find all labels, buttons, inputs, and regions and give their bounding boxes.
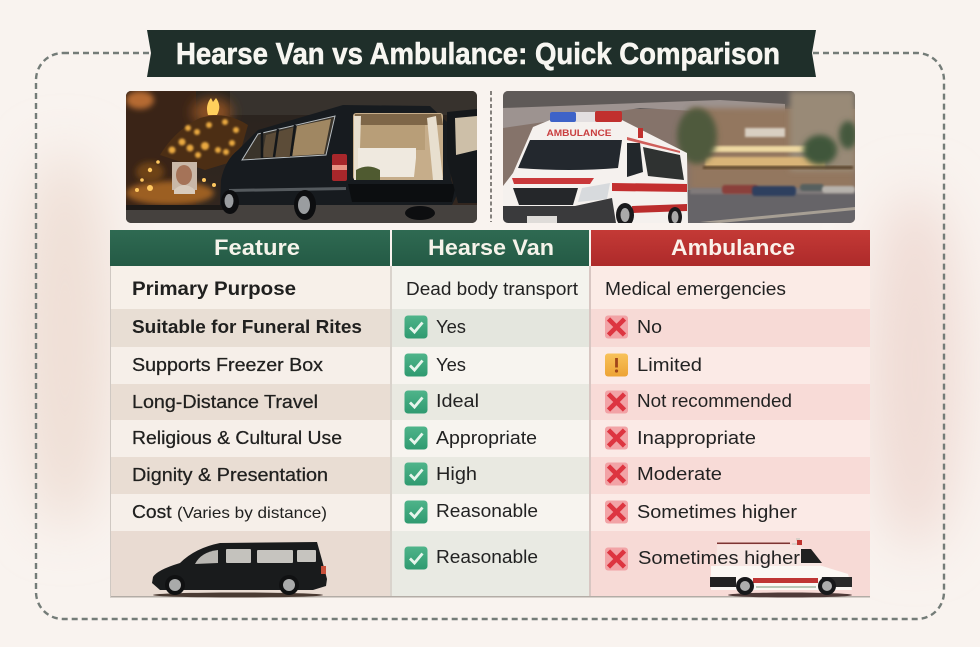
hearse van column values: Dead body transport [406,279,578,299]
not recommended: Not recommended [637,391,792,411]
yes: funeral rites [404,316,466,338]
photo: hearse van at funeral altar [126,91,477,223]
not recommended [605,390,792,414]
van body [220,105,457,205]
high [404,462,477,486]
ideal [404,390,479,414]
reasonable: last row: Reasonable [436,547,538,567]
ideal: Ideal [436,391,479,411]
limited: freezer box [605,354,702,376]
header: ambulance: Ambulance [671,235,795,260]
photo: ambulance on city street [503,91,857,227]
hearse van column values [404,279,578,570]
divider between photos [490,91,492,222]
feature labels: Cost (Varies by distance) [132,502,327,522]
icon: white ambulance [710,538,852,598]
reasonable: cost [404,500,538,524]
ambulance column values: Medical emergencies [605,279,786,299]
feature labels: Primary Purpose [132,279,296,300]
feature labels: Supports Freezer Box [132,355,323,375]
ambulance body [503,120,688,223]
header: ambulance [591,230,870,266]
feature labels: Suitable for Funeral Rites [132,317,362,337]
header: hearse van: Hearse Van [428,235,554,260]
icon: black hearse van [152,542,327,598]
high: High [436,464,477,484]
yes: freezer box [404,354,466,376]
feature labels: Religious & Cultural Use [132,428,342,448]
sometimes higher: cost: Sometimes higher [637,502,797,522]
header: hearse van [392,230,589,266]
ambulance column values [605,279,797,524]
header: feature: Feature [214,235,300,260]
no: funeral rites [605,316,662,338]
inappropriate: Inappropriate [637,428,756,448]
yes: funeral rites: Yes [436,317,466,337]
sometimes higher: last row [605,548,800,570]
moderate: Moderate [637,464,722,484]
header: feature [110,230,390,266]
sometimes higher: cost [605,500,797,524]
comparison table [110,230,870,598]
reasonable: cost: Reasonable [436,501,538,521]
reasonable: last row [404,546,538,570]
no: funeral rites: No [637,317,662,337]
feature labels: Dignity & Presentation [132,465,328,485]
photo: ambulance on city street: AMBULANCE [546,128,612,139]
inappropriate [605,426,756,450]
yes: freezer box: Yes [436,355,466,375]
title: Hearse Van vs Ambulance: Quick Comparison [176,36,780,71]
feature labels: Long-Distance Travel [132,392,318,412]
title banner [147,30,816,77]
row backgrounds [110,266,870,598]
sometimes higher: last row: Sometimes higher [638,548,800,568]
feature labels [132,279,362,522]
limited: freezer box: Limited [637,355,702,375]
appropriate: Appropriate [436,428,537,448]
moderate [605,462,722,486]
appropriate [404,426,537,450]
